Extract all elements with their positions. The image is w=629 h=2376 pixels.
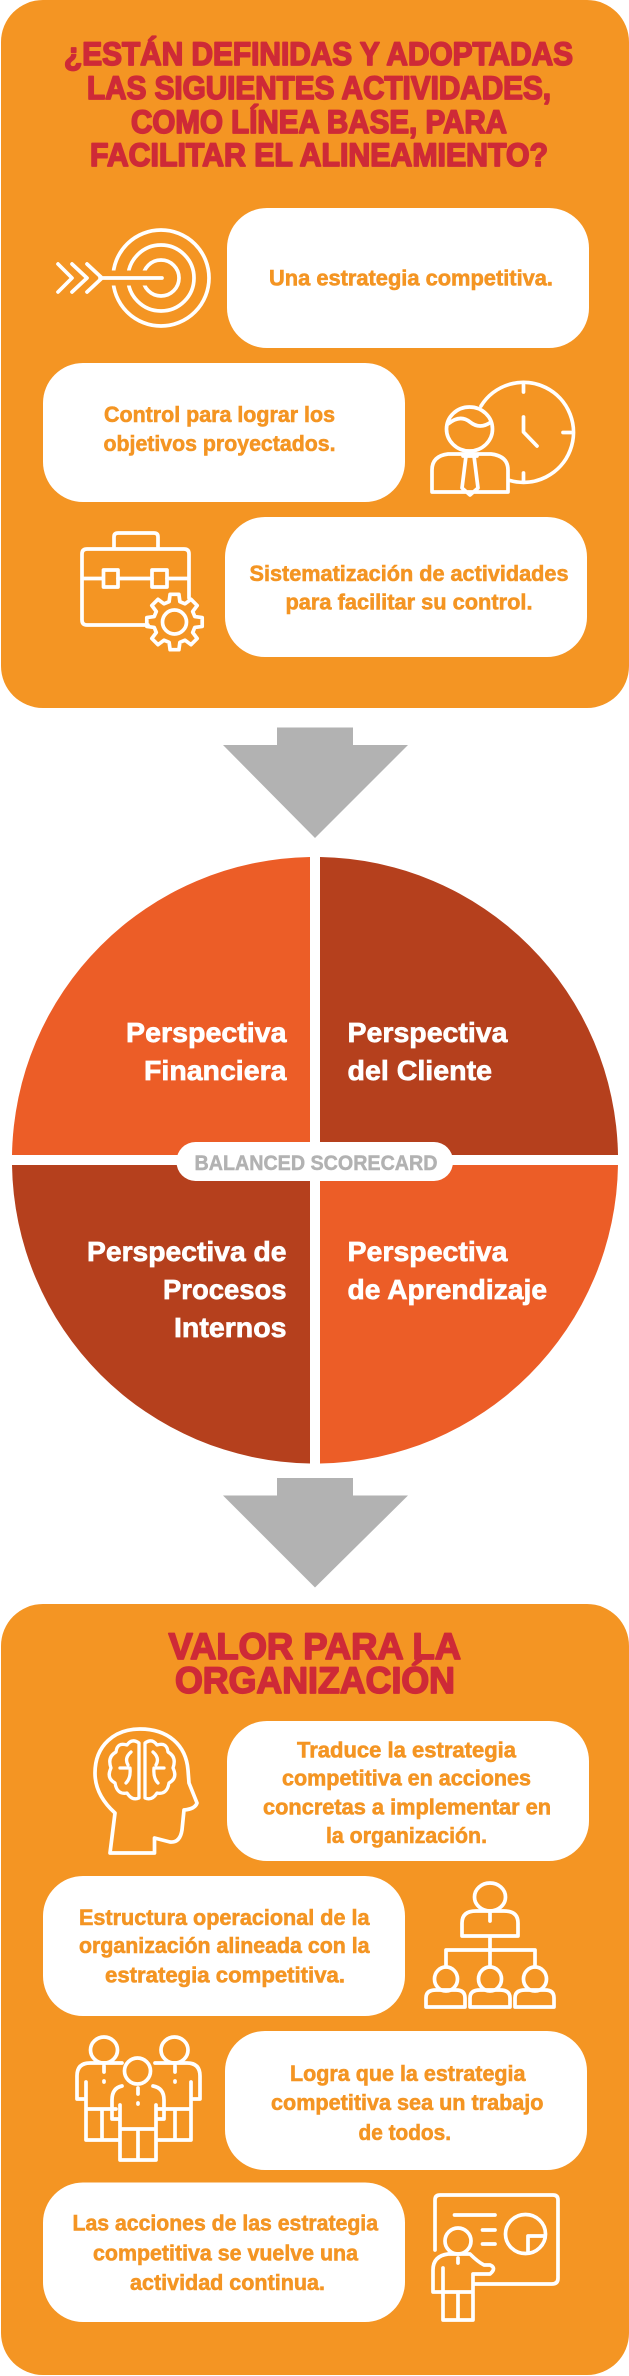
quadrant: internal process perspective: [12, 1165, 310, 1464]
card: continuous activity: actividad continua.: [130, 2270, 325, 2295]
heading: baseline question: LAS SIGUIENTES ACTIVIDADES,: [87, 70, 551, 106]
card: systematization: Sistematización de actividades: [250, 561, 568, 586]
icon: team of people: [77, 2037, 200, 2160]
quadrant: customer perspective: Perspectiva: [348, 1017, 508, 1048]
card: teamwork: de todos.: [358, 2120, 451, 2145]
icon: person with clock: [432, 382, 573, 495]
quadrant: learning perspective: Perspectiva: [348, 1236, 508, 1267]
quadrant: customer perspective: [320, 857, 618, 1155]
quadrant: internal process perspective: Procesos: [163, 1274, 286, 1305]
chart: balanced scorecard circle: [12, 857, 618, 1464]
label: balanced scorecard: [176, 1142, 453, 1181]
quadrant: learning perspective: [320, 1165, 618, 1464]
card: translates strategy: concretas a implementar en: [263, 1794, 551, 1820]
quadrant: internal process perspective: Perspectiva de: [87, 1236, 286, 1267]
card: translates strategy: competitiva en acciones: [282, 1766, 531, 1790]
card: aligned structure: Estructura operacional de la: [79, 1905, 370, 1930]
icon: target with arrow: [58, 230, 209, 326]
quadrant: learning perspective: de Aprendizaje: [348, 1274, 547, 1305]
card: systematization: para facilitar su control.: [286, 590, 532, 614]
heading: baseline question: ¿ESTÁN DEFINIDAS Y ADOPTADAS: [64, 36, 573, 72]
icon: org chart: [426, 1883, 554, 2007]
card: teamwork: Logra que la estrategia: [290, 2061, 526, 2086]
heading: value for the organization: VALOR PARA LA: [168, 1626, 461, 1667]
card: teamwork: competitiva sea un trabajo: [271, 2090, 544, 2115]
card: control objectives: [43, 363, 405, 502]
quadrant: financial perspective: Financiera: [144, 1055, 287, 1086]
label: balanced scorecard: BALANCED SCORECARD: [194, 1152, 438, 1175]
card: aligned structure: estrategia competitiva.: [105, 1962, 345, 1988]
card: control objectives: Control para lograr los: [104, 402, 335, 427]
heading: value for the organization: ORGANIZACIÓN: [175, 1659, 455, 1701]
card: aligned structure: organización alineada con la: [79, 1933, 370, 1958]
icon: briefcase with gear: [82, 533, 202, 650]
card: translates strategy: Traduce la estrategia: [297, 1738, 516, 1762]
card: competitive strategy: Una estrategia competitiva.: [269, 266, 553, 290]
card: continuous activity: [43, 2182, 405, 2322]
panel: baseline activities: [1, 0, 629, 708]
card: competitive strategy: [227, 208, 589, 348]
card: systematization: [225, 517, 587, 657]
card: continuous activity: competitiva se vuelve una: [93, 2240, 358, 2266]
quadrant: customer perspective: del Cliente: [348, 1055, 492, 1086]
panel: value for the organization: [1, 1604, 629, 2375]
card: teamwork: [225, 2031, 587, 2170]
card: continuous activity: Las acciones de las estrategia: [72, 2210, 378, 2236]
heading: baseline question: COMO LÍNEA BASE, PARA: [131, 104, 507, 140]
card: aligned structure: [43, 1876, 405, 2016]
card: control objectives: objetivos proyectados.: [104, 431, 336, 456]
heading: baseline question: [64, 36, 573, 173]
icon: head with brain: [95, 1729, 197, 1853]
card: translates strategy: [227, 1721, 589, 1861]
heading: baseline question: FACILITAR EL ALINEAMIENTO?: [90, 137, 548, 173]
heading: value for the organization: [168, 1626, 461, 1701]
card: translates strategy: la organización.: [326, 1823, 487, 1848]
arrow: down to value: [223, 1478, 408, 1588]
quadrant: financial perspective: [12, 857, 310, 1155]
arrow: down to scorecard: [223, 728, 408, 838]
icon: presenter at board: [433, 2195, 558, 2320]
quadrant: internal process perspective: Internos: [174, 1312, 286, 1343]
quadrant: financial perspective: Perspectiva: [126, 1017, 287, 1048]
